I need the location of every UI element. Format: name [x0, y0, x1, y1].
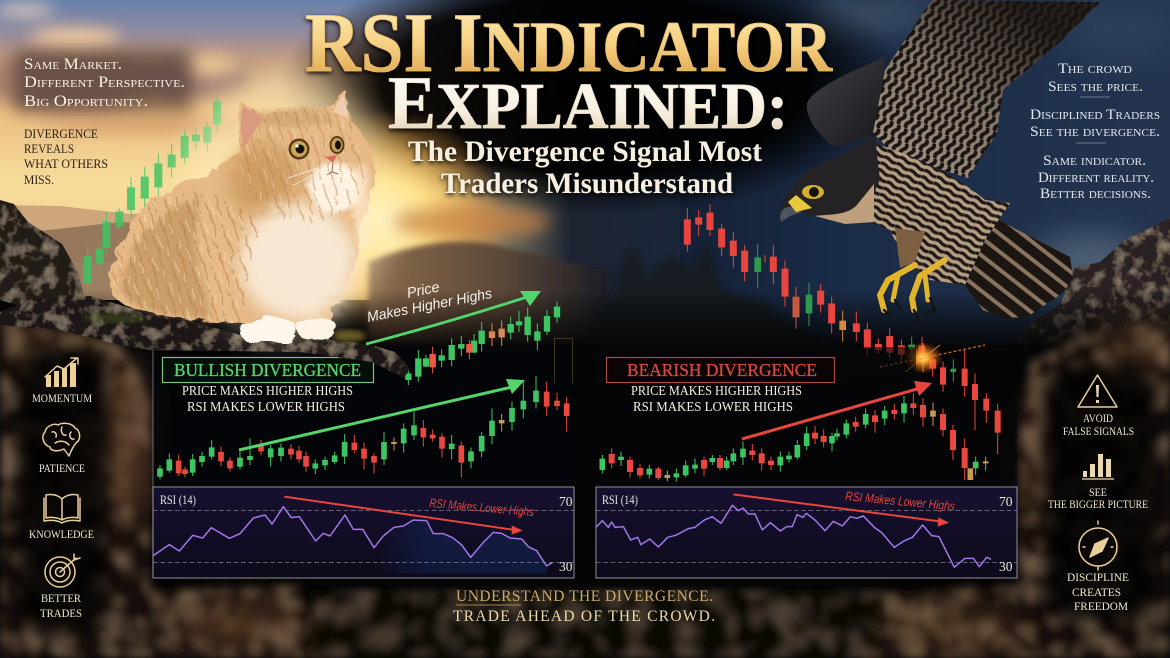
right tagline: Sees the price.	[1048, 79, 1143, 95]
right foreground rocks	[860, 320, 1170, 658]
sunset sky	[0, 0, 680, 300]
bottom call to action: TRADE AHEAD OF THE CROWD.	[453, 608, 715, 625]
cat paws	[240, 318, 336, 343]
left icon backing	[18, 350, 106, 630]
cat eyes	[288, 136, 344, 160]
sunset clouds	[0, 4, 260, 133]
see the bigger picture label: SEE	[1089, 487, 1107, 499]
better trades label: TRADES	[40, 608, 82, 620]
cat	[110, 75, 390, 343]
avoid false signals label: FALSE SIGNALS	[1063, 426, 1134, 438]
avoid false signals label	[1063, 413, 1134, 438]
icon: target	[45, 554, 80, 587]
storm sky	[420, 0, 1170, 345]
right wing	[873, 0, 1100, 178]
cat body	[110, 89, 374, 330]
left icon column	[29, 358, 94, 620]
axis 70: 70	[999, 494, 1013, 509]
axis 70: 70	[559, 494, 573, 509]
left top tagline	[14, 50, 192, 112]
rsi label: RSI (14)	[160, 493, 196, 507]
falcon	[780, 0, 1100, 320]
top left rock	[0, 200, 84, 312]
falcon cheek	[815, 184, 874, 224]
title vignette	[280, 0, 910, 215]
badge: BULLISH DIVERGENCE	[174, 360, 361, 380]
title	[305, 0, 833, 200]
knowledge label: KNOWLEDGE	[29, 529, 94, 541]
cat ears	[241, 94, 349, 148]
bottom centre rocks	[310, 590, 880, 658]
price extension candles	[408, 302, 572, 385]
right tagline: Disciplined Traders	[1030, 107, 1160, 123]
see the bigger picture label: THE BIGGER PICTURE	[1048, 499, 1148, 511]
lower fade	[0, 290, 1170, 350]
left top tagline: Same Market.	[24, 56, 122, 73]
rising green candles behind cat	[88, 93, 217, 293]
right icon column	[1048, 375, 1148, 613]
rsi arrow label: RSI Makes Lower Highs	[845, 489, 956, 514]
icon: book	[44, 494, 80, 523]
falcon talons	[880, 260, 945, 320]
rsi arrow	[284, 497, 515, 530]
warm rock highlights	[0, 325, 1170, 650]
bullish sub-text: RSI MAKES LOWER HIGHS	[187, 399, 345, 414]
right tagline: Different reality.	[1038, 170, 1154, 186]
right tagline: Same indicator.	[1043, 153, 1146, 169]
discipline label	[1067, 572, 1129, 613]
badge	[606, 358, 834, 382]
spark at peak	[880, 342, 985, 374]
icon: brain	[43, 423, 80, 456]
price arrow label: Makes Higher Highs	[366, 286, 493, 326]
right tagline: See the divergence.	[1030, 124, 1160, 140]
icon: warning	[1078, 375, 1117, 407]
sun glow	[270, 110, 506, 334]
bottom call to action	[453, 588, 715, 625]
right tagline: Better decisions.	[1040, 186, 1151, 202]
falling red candles	[687, 204, 933, 377]
icon: momentum	[45, 358, 78, 387]
cat glow	[180, 75, 390, 335]
left secondary text: DIVERGENCE	[24, 127, 98, 141]
bearish price chart	[602, 350, 998, 482]
rsi sub-panel	[153, 487, 574, 578]
momentum label: MOMENTUM	[32, 393, 92, 405]
panel: bullish divergence	[153, 302, 574, 578]
left secondary text: WHAT OTHERS	[24, 157, 108, 171]
right tagline: The crowd	[1058, 61, 1132, 77]
subtitle	[408, 135, 762, 200]
distant hills	[0, 205, 610, 345]
price arrow label: Price	[406, 279, 441, 302]
bearish sub-text	[631, 383, 802, 414]
tail	[950, 213, 1073, 318]
right tagline	[1030, 61, 1160, 202]
panel backing	[596, 380, 1017, 578]
left secondary text	[24, 127, 108, 187]
bearish sub-text: PRICE MAKES HIGHER HIGHS	[631, 383, 802, 398]
bearish sub-text: RSI MAKES LOWER HIGHS	[633, 399, 793, 414]
panel: bearish divergence	[596, 347, 1017, 578]
rsi line	[153, 507, 552, 566]
discipline label: DISCIPLINE	[1067, 572, 1129, 584]
rsi arrow	[733, 494, 942, 522]
price candlestick chart	[160, 376, 567, 479]
left secondary text: REVEALS	[24, 142, 74, 156]
right icon backing	[1045, 365, 1157, 620]
left secondary text: MISS.	[24, 173, 54, 187]
discipline label: CREATES	[1072, 587, 1121, 599]
thigh	[895, 228, 925, 268]
badge: BEARISH DIVERGENCE	[627, 360, 817, 380]
dark spires	[590, 240, 840, 345]
better trades label	[40, 593, 82, 620]
right mountain	[1010, 218, 1170, 345]
bullish sub-text: PRICE MAKES HIGHER HIGHS	[182, 383, 353, 398]
rsi label: RSI (14)	[602, 493, 638, 507]
left top tagline: Different Perspective.	[24, 74, 185, 91]
panel backing	[153, 347, 574, 578]
bottom call to action: UNDERSTAND THE DIVERGENCE.	[456, 588, 713, 605]
left top tagline: Big Opportunity.	[24, 93, 148, 110]
green divergence arrow	[239, 379, 525, 450]
red divergence arrow	[742, 381, 932, 439]
subtitle: Traders Misunderstand	[441, 167, 733, 200]
left wing	[807, 57, 885, 147]
falcon head	[780, 136, 880, 216]
rsi line	[596, 505, 991, 567]
cat nose and mouth	[288, 155, 356, 186]
bullish sub-text	[182, 383, 353, 414]
rsi sub-panel	[596, 487, 1017, 578]
storm clouds	[800, 0, 1170, 290]
rsi arrow label: RSI Makes Lower Highs	[429, 496, 535, 519]
falcon body	[822, 142, 1010, 285]
better trades label: BETTER	[41, 593, 81, 605]
see the bigger picture label	[1048, 487, 1148, 511]
avoid false signals label: AVOID	[1083, 413, 1113, 425]
title line 2: EXPLAINED:	[388, 62, 788, 145]
icon: compass	[1079, 521, 1117, 570]
axis 30: 30	[559, 559, 573, 574]
upward price arrow	[366, 291, 541, 344]
subtitle: The Divergence Signal Most	[408, 135, 762, 168]
icon: bars	[1082, 454, 1114, 479]
falcon beak	[780, 195, 812, 222]
patience label: PATIENCE	[39, 463, 85, 475]
discipline label: FREEDOM	[1074, 601, 1128, 613]
falcon eye	[802, 185, 824, 199]
mossy ledge under cat	[0, 296, 410, 378]
left foreground rocks	[0, 320, 325, 658]
axis 30: 30	[999, 559, 1013, 574]
